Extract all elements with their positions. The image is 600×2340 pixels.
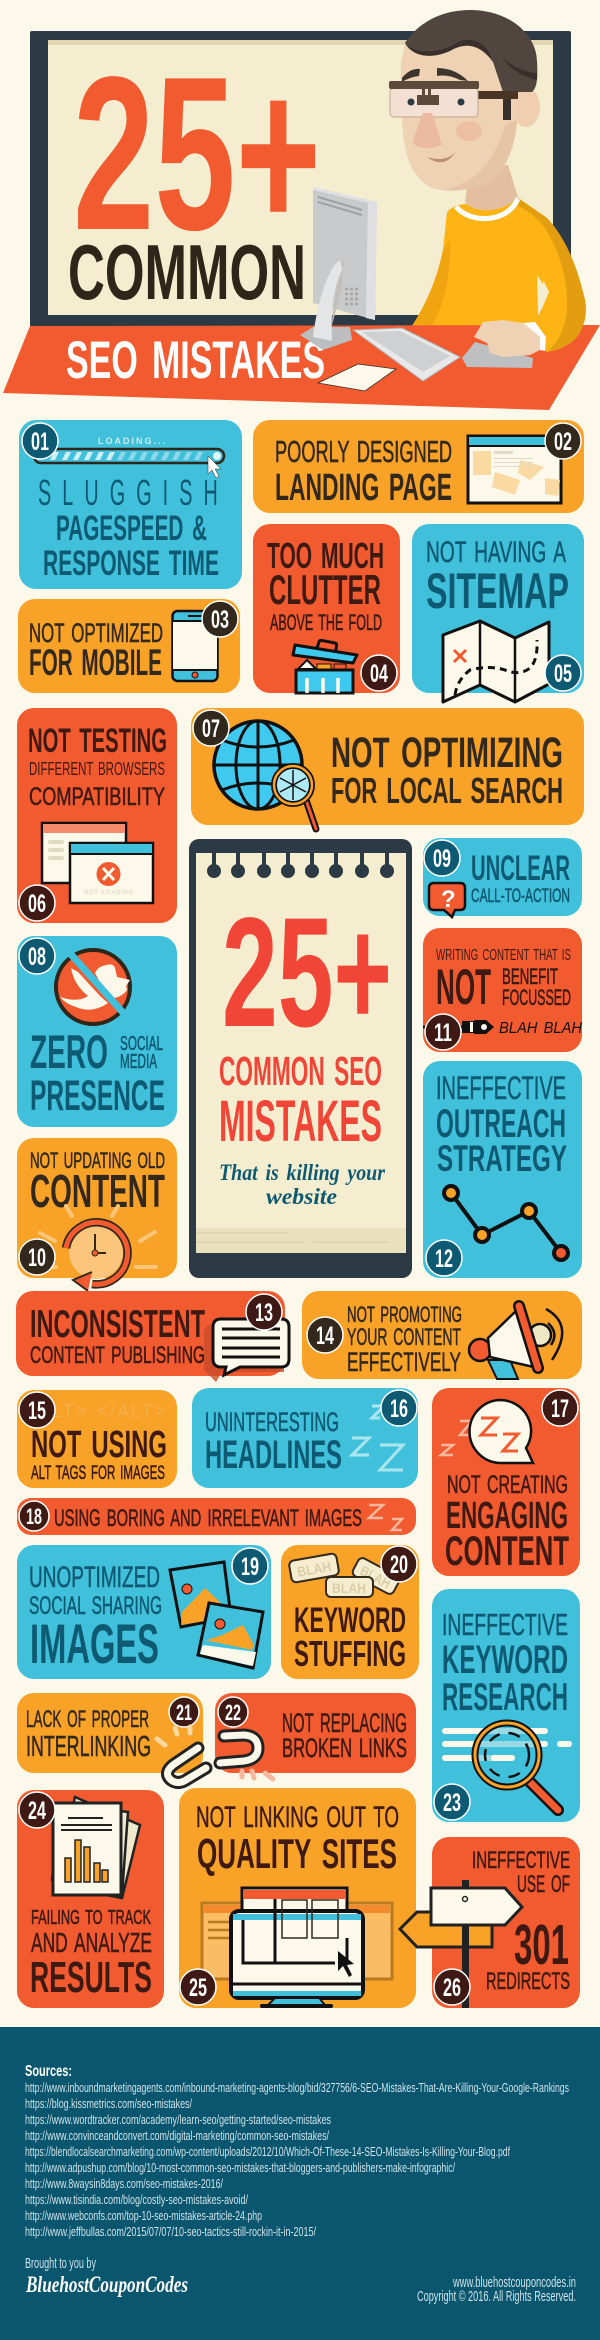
icon: line chart — [444, 1186, 568, 1260]
icon: crossed-out bird — [56, 950, 130, 1024]
number badge 09 — [424, 840, 460, 876]
panel: 24 track results — [17, 1790, 164, 2008]
number badge 23 — [434, 1784, 470, 1820]
icon: progress bar — [34, 449, 224, 478]
heading — [30, 1025, 165, 1120]
panel: 13 inconsistent publishing — [16, 1291, 289, 1382]
number badge 03 — [202, 601, 238, 637]
heading: NOT UPDATING OLD — [30, 1148, 165, 1173]
number badge 21: 21 — [176, 1700, 192, 1725]
heading: UNOPTIMIZED — [29, 1561, 160, 1594]
number badge 06 — [19, 885, 55, 921]
heading: DIFFERENT BROWSERS — [29, 759, 165, 779]
heading: HEADLINES — [205, 1433, 342, 1477]
panel: footer — [0, 2027, 600, 2340]
sources list: http://www.webconfs.com/top-10-seo-mistakes-article-24.php — [25, 2208, 262, 2223]
panel: 17 engaging content — [432, 1388, 580, 1576]
number badge 09: 09 — [433, 845, 451, 873]
heading — [267, 535, 384, 635]
number badge 01 — [22, 423, 58, 459]
faded alt markup: LT> </ALT> — [52, 1401, 165, 1421]
panel: 18 boring images — [17, 1498, 416, 1535]
panel: central notebook — [189, 839, 412, 1278]
panel: 06 browser compatibility — [17, 708, 177, 923]
heading: UNINTERESTING — [205, 1407, 339, 1437]
icon: blah tags: BLAH — [332, 1580, 366, 1596]
heading — [436, 947, 571, 1015]
number badge 05 — [545, 655, 581, 691]
icon: folded map — [443, 621, 549, 702]
icon: browser windows — [42, 823, 153, 903]
heading: BENEFIT — [502, 964, 558, 989]
heading — [205, 1407, 342, 1477]
icon: desktop with websites — [202, 1888, 392, 2008]
icon: question bubble: ? — [441, 886, 456, 913]
icon: blah tags: BLAH — [358, 1562, 393, 1591]
number badge 07: 07 — [202, 715, 220, 743]
heading: CONTENT — [30, 1165, 165, 1217]
number badge 19 — [232, 1548, 268, 1584]
heading — [472, 1847, 570, 1995]
heading: INTERLINKING — [26, 1731, 151, 1763]
heading: NOT PROMOTING — [347, 1302, 462, 1327]
heading: ABOVE THE FOLD — [270, 610, 382, 635]
number badge 12 — [426, 1240, 462, 1276]
number badge 26 — [434, 1969, 470, 2005]
sources list — [25, 2080, 569, 2239]
number badge 07 — [193, 710, 229, 746]
mouse and hand — [462, 320, 546, 368]
heading: YOUR CONTENT — [347, 1324, 461, 1351]
red desk banner — [3, 325, 600, 410]
heading: USING BORING AND IRRELEVANT IMAGES — [54, 1505, 362, 1532]
panel: 22 broken links — [215, 1693, 416, 1773]
heading — [30, 1907, 152, 2002]
number badge 16: 16 — [390, 1395, 408, 1423]
heading: STUFFING — [294, 1633, 406, 1674]
panel: 12 outreach — [423, 1061, 582, 1278]
heading: PAGESPEED & — [56, 509, 207, 548]
panel: 05 sitemap — [412, 524, 584, 702]
sources list: http://www.jeffbullas.com/2015/07/07/10-seo-tactics-still-rockin-it-in-2015/ — [25, 2224, 316, 2239]
heading: POORLY DESIGNED — [275, 434, 452, 469]
heading: NOT — [436, 959, 491, 1015]
number badge 12: 12 — [435, 1245, 453, 1273]
number badge 15: 15 — [28, 1397, 46, 1425]
heading — [30, 1148, 165, 1217]
number badge 25: 25 — [189, 1974, 207, 2002]
panel: 10 old content — [17, 1138, 177, 1291]
icon: broken chain links — [157, 1727, 273, 1782]
panel: 02 landing page — [253, 420, 584, 513]
heading: RESULTS — [30, 1953, 152, 2002]
number badge 04 — [361, 655, 397, 691]
panel: 11 benefit focussed — [423, 928, 582, 1052]
heading: COMPATIBILITY — [29, 783, 165, 811]
panel: 16 headlines — [192, 1388, 418, 1488]
panel: 01 sluggish pagespeed — [19, 420, 242, 589]
heading: MEDIA — [120, 1051, 157, 1073]
number badge 08 — [19, 938, 55, 974]
sources list: https://www.wordtracker.com/academy/learn-seo/getting-started/seo-mistakes — [25, 2112, 331, 2127]
left sweater shading — [412, 240, 450, 326]
copyright — [417, 2274, 576, 2305]
panel: 07 local search — [191, 708, 584, 829]
heading: NOT REPLACING — [282, 1708, 407, 1738]
handwritten blah text: BLAH BLAH — [499, 1020, 582, 1037]
heading — [331, 729, 563, 811]
gap behind arm — [537, 275, 549, 316]
heading — [275, 434, 452, 509]
panel: 08 social media — [17, 936, 177, 1127]
notebook title: COMMON SEO — [219, 1048, 382, 1094]
panel: 21 interlinking — [17, 1693, 203, 1773]
number badge 24 — [19, 1792, 55, 1828]
heading: ALT TAGS FOR IMAGES — [31, 1463, 165, 1484]
keyboard — [353, 328, 460, 381]
title: 25+: 25+ — [73, 32, 321, 276]
number badge 14 — [307, 1317, 343, 1353]
heading: SOCIAL — [120, 1033, 163, 1055]
heading — [28, 722, 167, 811]
heading: QUALITY SITES — [197, 1830, 397, 1877]
number badge 15 — [19, 1392, 55, 1428]
heading — [30, 1303, 205, 1369]
number badge 02: 02 — [554, 428, 572, 456]
icon: report pages with bar chart — [52, 1797, 140, 1898]
heading: LACK OF PROPER — [26, 1706, 149, 1733]
heading: EFFECTIVELY — [347, 1347, 461, 1377]
header illustration — [3, 10, 600, 410]
icon: speech bubble — [204, 1319, 289, 1382]
number badge 24: 24 — [28, 1797, 46, 1825]
heading: FAILING TO TRACK — [31, 1907, 151, 1929]
number badge 10: 10 — [28, 1244, 46, 1272]
icon: blah tags: BLAH — [296, 1558, 332, 1580]
number badge 20: 20 — [390, 1551, 408, 1579]
heading: NOT LINKING OUT TO — [196, 1801, 399, 1834]
panel: 25 quality sites — [179, 1788, 416, 2008]
panel: 04 clutter — [253, 524, 400, 693]
icon: pen nib — [423, 1020, 494, 1034]
sources list: http://www.convinceandconvert.com/digital-marketing/common-seo-mistakes/ — [25, 2128, 329, 2143]
heading — [426, 536, 569, 619]
heading: INCONSISTENT — [30, 1303, 205, 1346]
heading: SOCIAL SHARING — [29, 1592, 162, 1620]
heading: SLUGGISH — [38, 474, 218, 514]
number badge 21 — [169, 1697, 199, 1727]
heading: AND ANALYZE — [31, 1927, 152, 1958]
icon: megaphone — [469, 1306, 562, 1379]
heading — [31, 1424, 167, 1484]
number badge 26: 26 — [443, 1974, 461, 2002]
heading: RESPONSE TIME — [43, 544, 219, 583]
credit: BluehostCouponCodes — [25, 2272, 188, 2297]
icon: globe with magnifier — [214, 721, 316, 829]
heading: BROKEN LINKS — [282, 1733, 407, 1763]
subtitle: website — [266, 1184, 337, 1209]
heading: IMAGES — [30, 1612, 159, 1675]
icon: blah tags — [288, 1553, 401, 1597]
panel: 15 alt tags — [17, 1390, 177, 1488]
number badge 22: 22 — [225, 1700, 241, 1725]
panel: 19 social images — [17, 1545, 271, 1679]
heading: LANDING PAGE — [275, 467, 452, 509]
sources list: http://www.8waysin8days.com/seo-mistakes-2016/ — [25, 2176, 223, 2191]
number badge 16 — [381, 1390, 417, 1426]
icon: signpost — [400, 1880, 522, 2008]
panel: 09 call to action — [423, 838, 582, 917]
number badge 22 — [218, 1697, 248, 1727]
title: common: COMMON — [68, 228, 306, 316]
paper sheet — [318, 364, 396, 391]
icon: browser wireframe — [468, 436, 561, 503]
number badge 06: 06 — [28, 890, 46, 918]
computer monitor — [300, 187, 377, 350]
number badge 13 — [246, 1294, 282, 1330]
heading: NOT TESTING — [28, 722, 167, 760]
number badge 14: 14 — [316, 1322, 334, 1350]
subtitle: That is killing your — [219, 1160, 386, 1185]
heading: CLUTTER — [269, 566, 381, 613]
icon: phone — [172, 611, 218, 681]
number badge 02 — [545, 423, 581, 459]
notebook rings — [208, 853, 394, 878]
icon: trash can — [293, 640, 357, 693]
icon: sleeping speech bubble — [441, 1400, 533, 1463]
heading — [442, 1607, 568, 1719]
heading: PRESENCE — [30, 1072, 165, 1120]
sources heading: Sources: — [25, 2063, 72, 2080]
heading — [294, 1601, 406, 1674]
icon: browser windows: NOT LOADING — [84, 890, 133, 896]
number badge 10 — [19, 1239, 55, 1275]
heading — [29, 1561, 162, 1675]
icon: photo prints — [170, 1562, 263, 1668]
icon: sleepy z letters — [352, 1406, 403, 1470]
notebook title: MISTAKES — [219, 1089, 382, 1154]
heading: FOR MOBILE — [29, 642, 162, 683]
sources list: https://blog.kissmetrics.com/seo-mistakes/ — [25, 2096, 192, 2111]
number badge 04: 04 — [370, 660, 388, 688]
number badge 17: 17 — [551, 1395, 569, 1423]
number badge 17 — [542, 1390, 578, 1426]
number badge 11: 11 — [434, 1019, 452, 1047]
credit — [25, 2255, 188, 2297]
heading: TOO MUCH — [267, 535, 384, 576]
number badge 05: 05 — [554, 660, 572, 688]
heading — [347, 1302, 462, 1377]
person — [389, 10, 586, 352]
panel: 14 promoting content — [302, 1291, 582, 1379]
heading: KEYWORD — [294, 1601, 406, 1640]
heading — [196, 1801, 399, 1877]
icon: clock with arrow — [40, 1206, 156, 1291]
panel: 20 keyword stuffing — [281, 1545, 419, 1679]
number badge 18: 18 — [26, 1504, 42, 1529]
heading — [471, 849, 570, 907]
panel: 26 redirects — [400, 1837, 580, 2008]
heading — [436, 1070, 567, 1179]
number badge 01: 01 — [31, 428, 49, 456]
panel: 03 mobile — [18, 599, 240, 693]
heading: NOT USING — [31, 1424, 167, 1466]
heading: CONTENT PUBLISHING — [30, 1342, 205, 1369]
notebook title — [219, 1048, 382, 1154]
credit: Brought to you by — [25, 2255, 96, 2272]
monitor frame backdrop — [30, 31, 571, 327]
panel: 23 keyword research — [432, 1589, 580, 1822]
number badge 11 — [425, 1014, 461, 1050]
heading — [38, 474, 219, 583]
number badge 13: 13 — [255, 1299, 273, 1327]
banner title: SEO MISTAKES — [66, 331, 325, 390]
heading — [26, 1706, 151, 1763]
number badge 03: 03 — [211, 606, 229, 634]
number badge 18 — [19, 1501, 49, 1531]
heading — [445, 1471, 569, 1574]
person torso — [412, 198, 547, 337]
icon: z letters — [369, 1505, 402, 1530]
loading label: LOADING... — [98, 436, 165, 446]
heading — [282, 1708, 407, 1763]
number badge 19: 19 — [241, 1553, 259, 1581]
subtitle — [219, 1160, 386, 1209]
icon: magnifier over text lines — [445, 1723, 569, 1810]
sources list: https://www.tisindia.com/blog/costly-seo-mistakes-avoid/ — [25, 2192, 248, 2207]
number badge 08: 08 — [28, 943, 46, 971]
heading — [29, 618, 163, 683]
big 25+: 25+ — [222, 886, 392, 1060]
heading: NOT OPTIMIZED — [29, 618, 163, 648]
icon: question bubble — [429, 883, 465, 917]
number badge 25 — [180, 1969, 216, 2005]
number badge 23: 23 — [443, 1789, 461, 1817]
heading: ZERO — [30, 1025, 108, 1078]
